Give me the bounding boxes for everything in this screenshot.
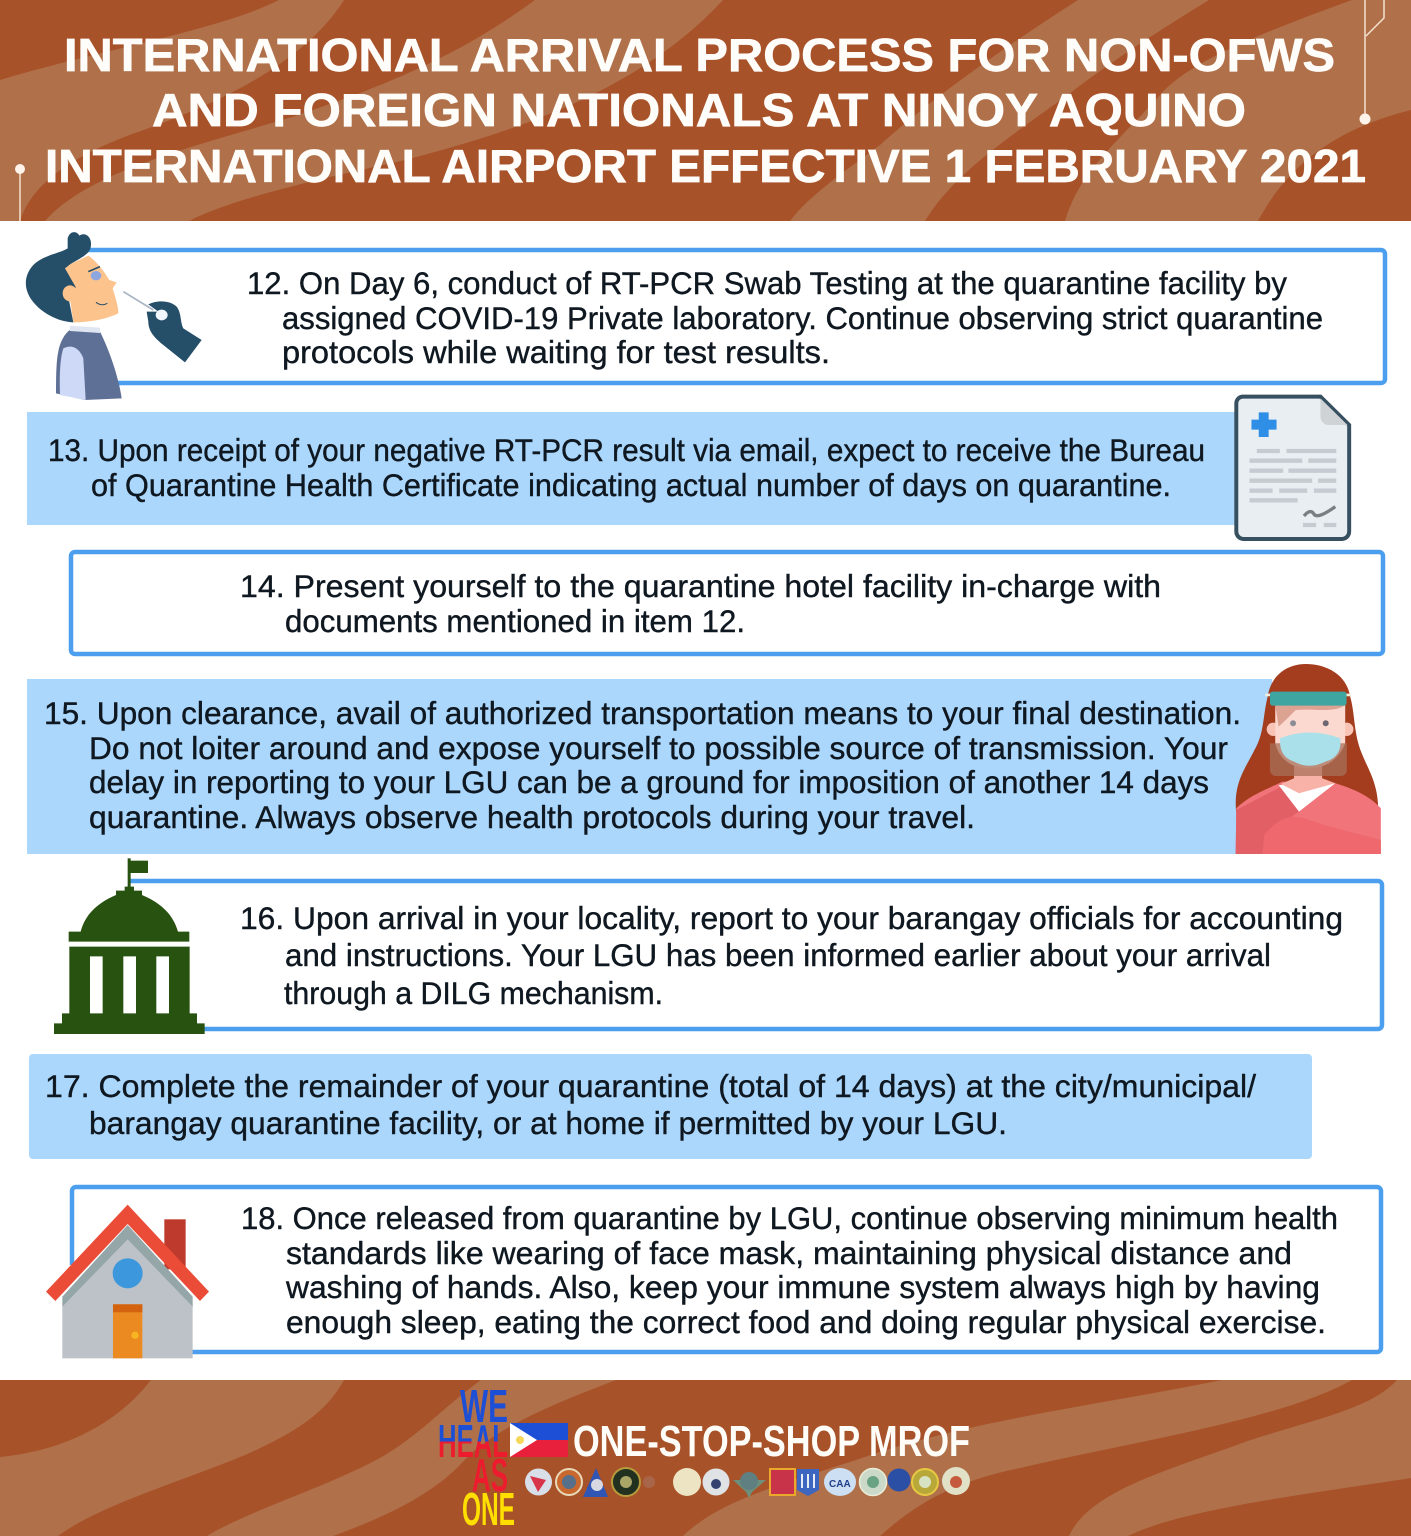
icon: swab test person (26, 232, 202, 400)
logo: we heal as one: AS (472, 1449, 508, 1501)
footer banner (0, 1380, 1411, 1536)
panel: step 15: delay in reporting to your LGU can be a ground for imposition of another 14 days (89, 764, 1209, 800)
panel: step 18 (72, 1187, 1381, 1352)
panel: step 17 (29, 1054, 1312, 1159)
icon: health certificate (1236, 397, 1349, 539)
agency seals (525, 1467, 970, 1498)
panel: step 16: through a DILG mechanism. (284, 975, 663, 1011)
panel: step 15: 15. Upon clearance, avail of authorized transportation means to your final destination. (44, 695, 1241, 731)
panel: step 18: 18. Once released from quarantine by LGU, continue observing minimum health (241, 1200, 1338, 1236)
header banner (0, 0, 1411, 221)
title: INTERNATIONAL AIRPORT EFFECTIVE 1 FEBRUARY 2021 (45, 140, 1366, 192)
panel: step 14 (71, 552, 1383, 654)
panel: step 17: 17. Complete the remainder of your quarantine (total of 14 days) at the city/municipal/ (45, 1068, 1256, 1104)
icon: philippine flag (510, 1423, 568, 1457)
title (45, 29, 1366, 192)
panel: step 16: and instructions. Your LGU has been informed earlier about your arrival (285, 937, 1271, 973)
footer heading: ONE-STOP-SHOP MROF (573, 1417, 970, 1466)
logo: we heal as one: WE (460, 1380, 508, 1432)
panel: step 13 (27, 412, 1242, 525)
panel: step 12: protocols while waiting for test results. (282, 334, 830, 370)
panel: step 17: barangay quarantine facility, or at home if permitted by your LGU. (89, 1105, 1007, 1141)
panel: step 18: washing of hands. Also, keep your immune system always high by having (285, 1269, 1320, 1305)
title: AND FOREIGN NATIONALS AT NINOY AQUINO (152, 84, 1246, 136)
panel: step 18: enough sleep, eating the correct food and doing regular physical exercise. (286, 1304, 1326, 1340)
icon: government building (54, 858, 205, 1034)
panel: step 12: assigned COVID-19 Private laboratory. Continue observing strict quarantine (282, 300, 1323, 336)
panel: step 13: of Quarantine Health Certificate indicating actual number of days on quarantine. (91, 467, 1171, 503)
panel: step 12 (88, 250, 1385, 383)
panel: step 12: 12. On Day 6, conduct of RT-PCR Swab Testing at the quarantine facility by (247, 265, 1287, 301)
panel: step 15: quarantine. Always observe health protocols during your travel. (89, 799, 975, 835)
panel: step 16: 16. Upon arrival in your locality, report to your barangay officials for accounting (240, 900, 1343, 936)
panel: step 16 (128, 881, 1382, 1029)
panel: step 14: 14. Present yourself to the quarantine hotel facility in-charge with (240, 568, 1161, 604)
panel: step 13: 13. Upon receipt of your negative RT-PCR result via email, expect to receive the Bureau (48, 432, 1205, 468)
panel: step 18: standards like wearing of face mask, maintaining physical distance and (286, 1235, 1292, 1271)
logo: we heal as one: HEAL (438, 1415, 508, 1467)
agency seals: CAA (829, 1479, 851, 1490)
panel: step 15 (27, 679, 1272, 854)
icon: house (46, 1205, 209, 1358)
logo: we heal as one: ONE (462, 1483, 515, 1535)
panel: step 15: Do not loiter around and expose yourself to possible source of transmission. Your (89, 730, 1228, 766)
title: INTERNATIONAL ARRIVAL PROCESS FOR NON-OFWS (64, 29, 1335, 81)
panel: step 14: documents mentioned in item 12. (285, 603, 745, 639)
logo: we heal as one (438, 1380, 515, 1535)
icon: woman with mask and face shield (1236, 664, 1381, 854)
